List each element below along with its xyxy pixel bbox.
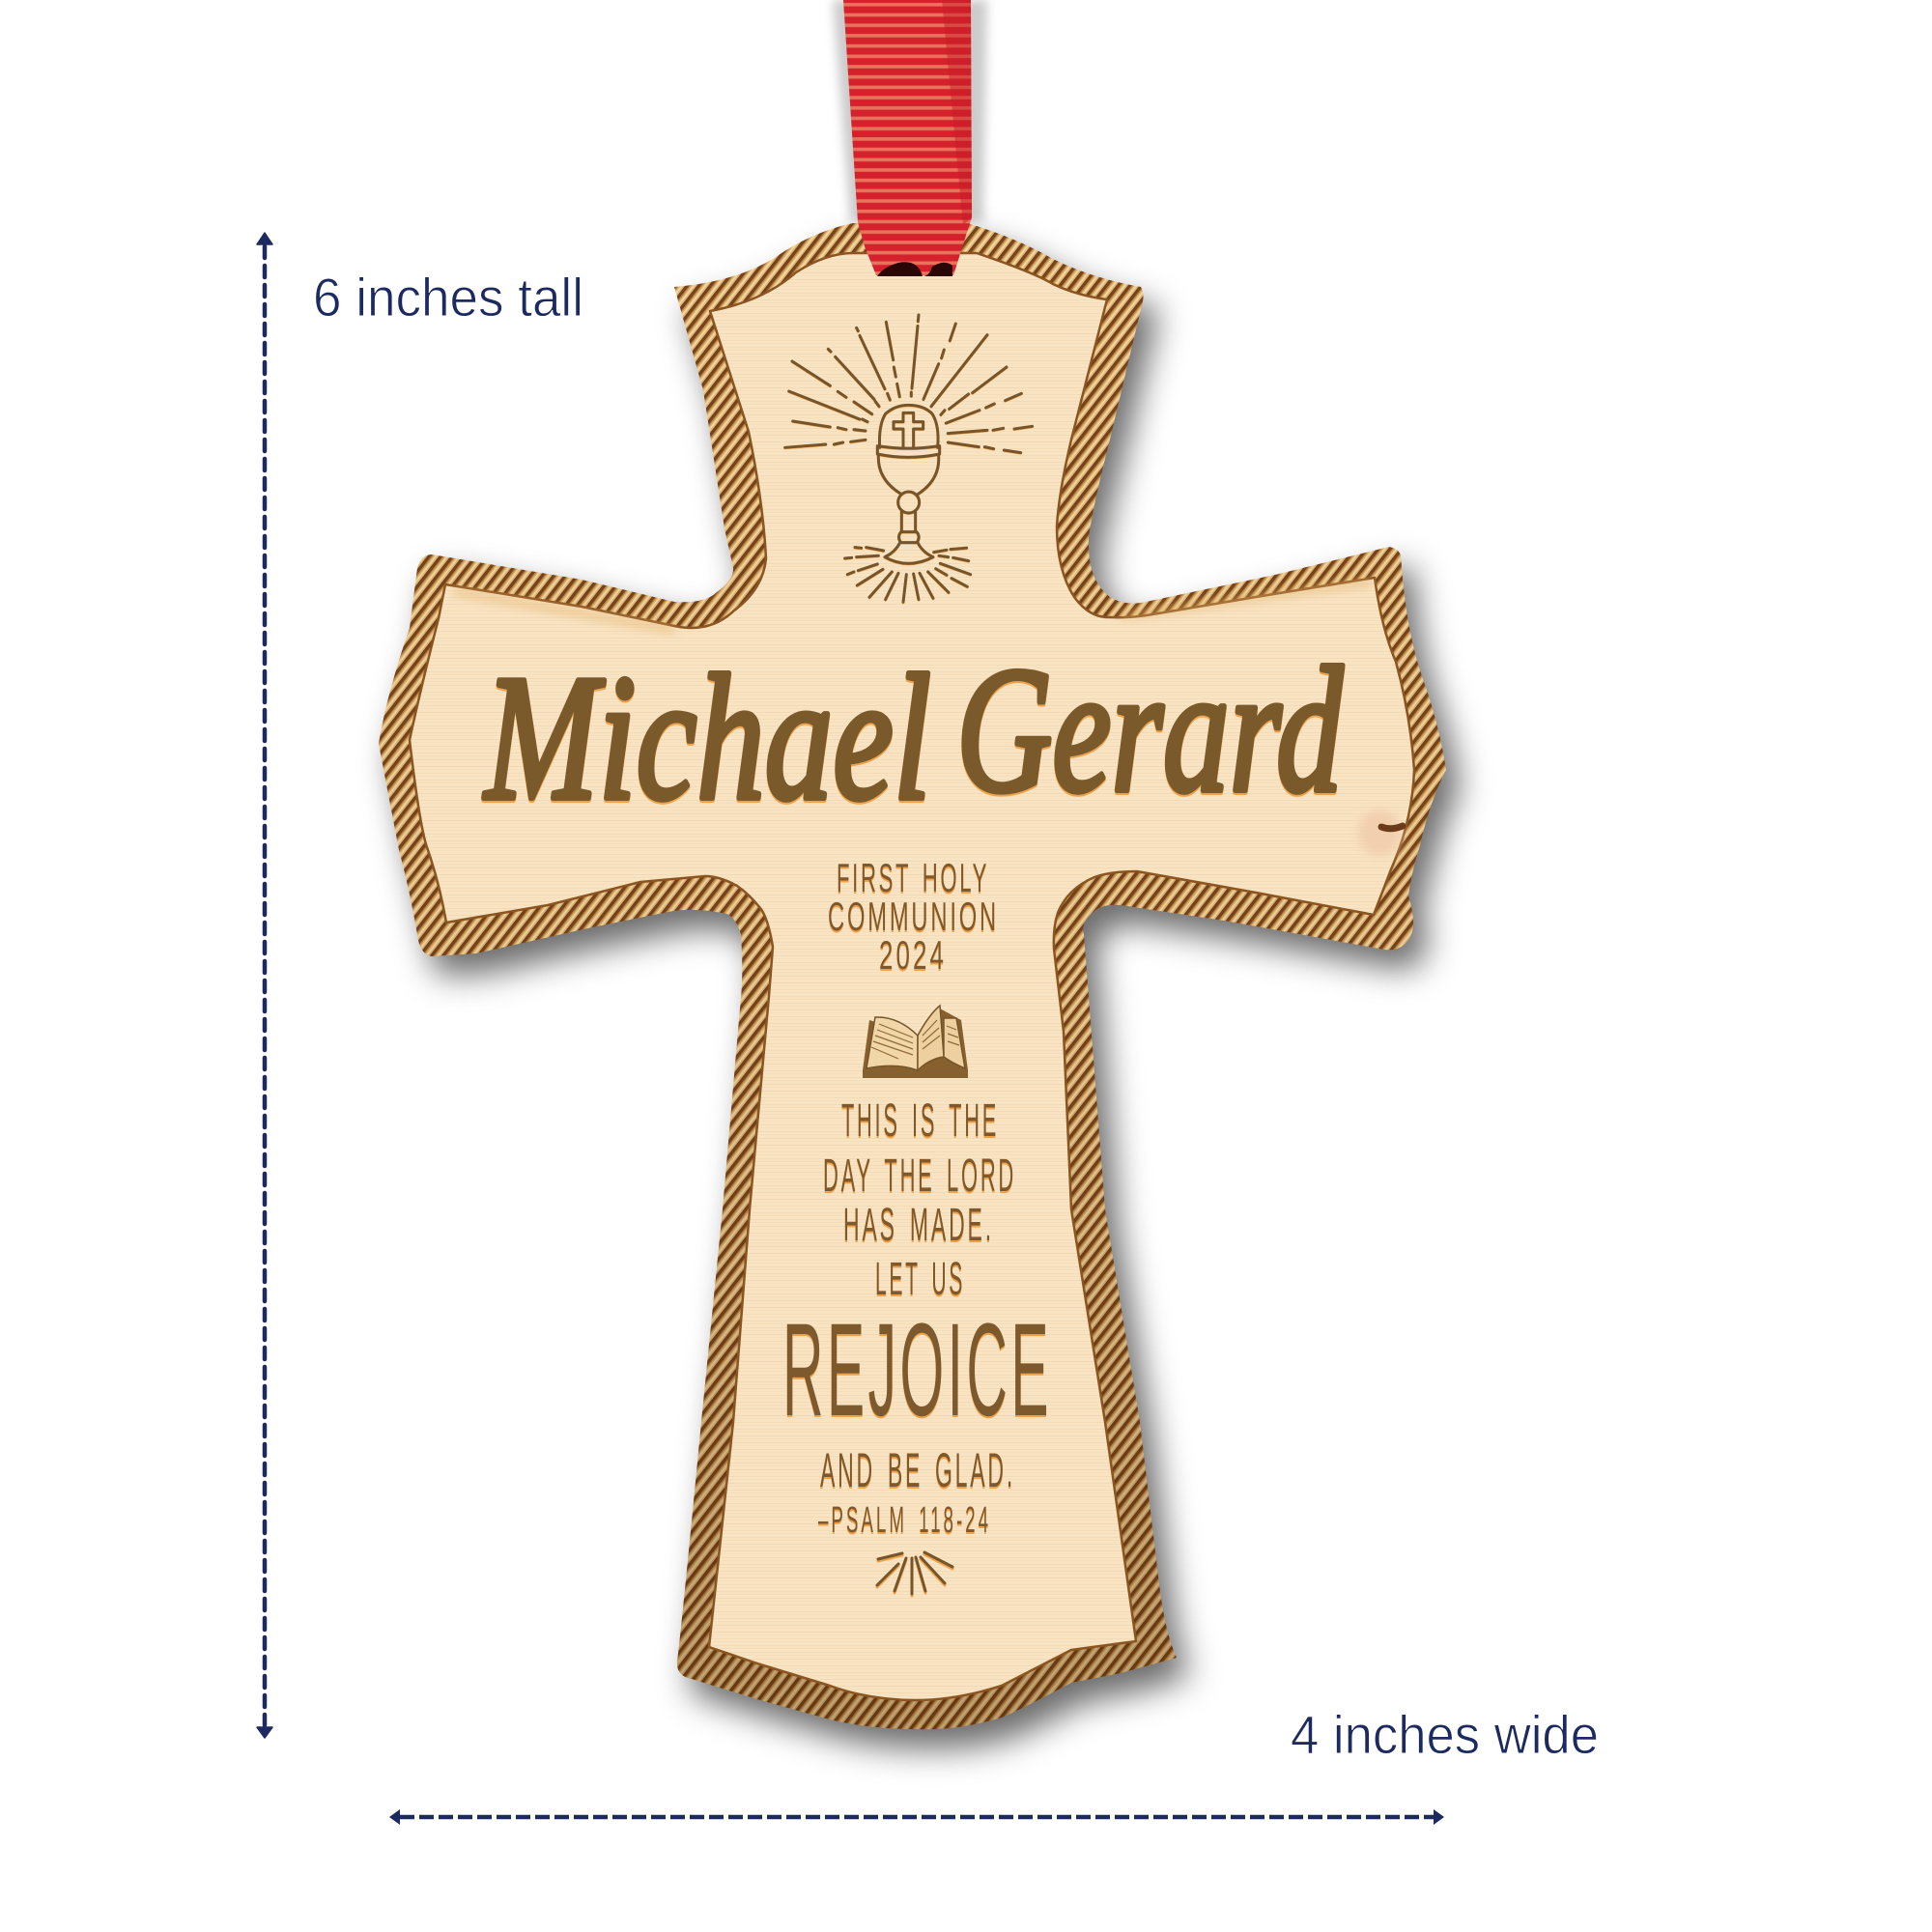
psalm verse: HAS MADE. xyxy=(843,1200,994,1251)
occasion text xyxy=(828,855,999,978)
chalice stem and foot xyxy=(885,492,933,563)
wood knot xyxy=(1358,810,1403,856)
psalm verse: THIS IS THE xyxy=(841,1095,999,1147)
smooth wood face xyxy=(410,253,1414,1700)
psalm verse: LET US xyxy=(875,1254,965,1305)
upper light rays xyxy=(785,315,1033,453)
chalice icon with rays xyxy=(785,315,1033,602)
carved border xyxy=(379,223,1446,1729)
name: Michael Gerard: Gerard xyxy=(956,631,1344,830)
psalm verse: –PSALM 118-24 xyxy=(818,1500,991,1541)
psalm verse xyxy=(782,1095,1052,1541)
lower light rays xyxy=(845,548,971,602)
ribbon slot shadow xyxy=(877,262,952,276)
height arrow xyxy=(257,233,272,1738)
ribbon side fold xyxy=(942,0,972,225)
cross ornament xyxy=(379,223,1446,1729)
chalice cup xyxy=(877,446,940,495)
open book icon xyxy=(863,1006,968,1078)
psalm verse: DAY THE LORD xyxy=(823,1151,1016,1202)
ornament shadow xyxy=(392,242,1460,1748)
width arrow xyxy=(389,1809,1444,1825)
hanging red ribbon xyxy=(843,0,972,276)
occasion text: FIRST HOLY xyxy=(837,855,989,900)
occasion text: 2024 xyxy=(879,932,947,978)
burn marks along arm tops xyxy=(454,582,1372,630)
psalm verse: AND BE GLAD. xyxy=(820,1443,1015,1497)
hanging ribbon shadow xyxy=(833,0,987,222)
name: Michael Gerard xyxy=(483,631,1344,838)
small bottom rays icon xyxy=(877,1552,952,1594)
occasion text: COMMUNION xyxy=(828,894,999,939)
width label: 4 inches wide xyxy=(1291,1704,1599,1765)
text: REJOICE xyxy=(782,1296,1052,1444)
chalice host and cross xyxy=(879,405,938,447)
height label: 6 inches tall xyxy=(313,267,583,327)
name: Michael Gerard: Michael xyxy=(483,639,931,838)
